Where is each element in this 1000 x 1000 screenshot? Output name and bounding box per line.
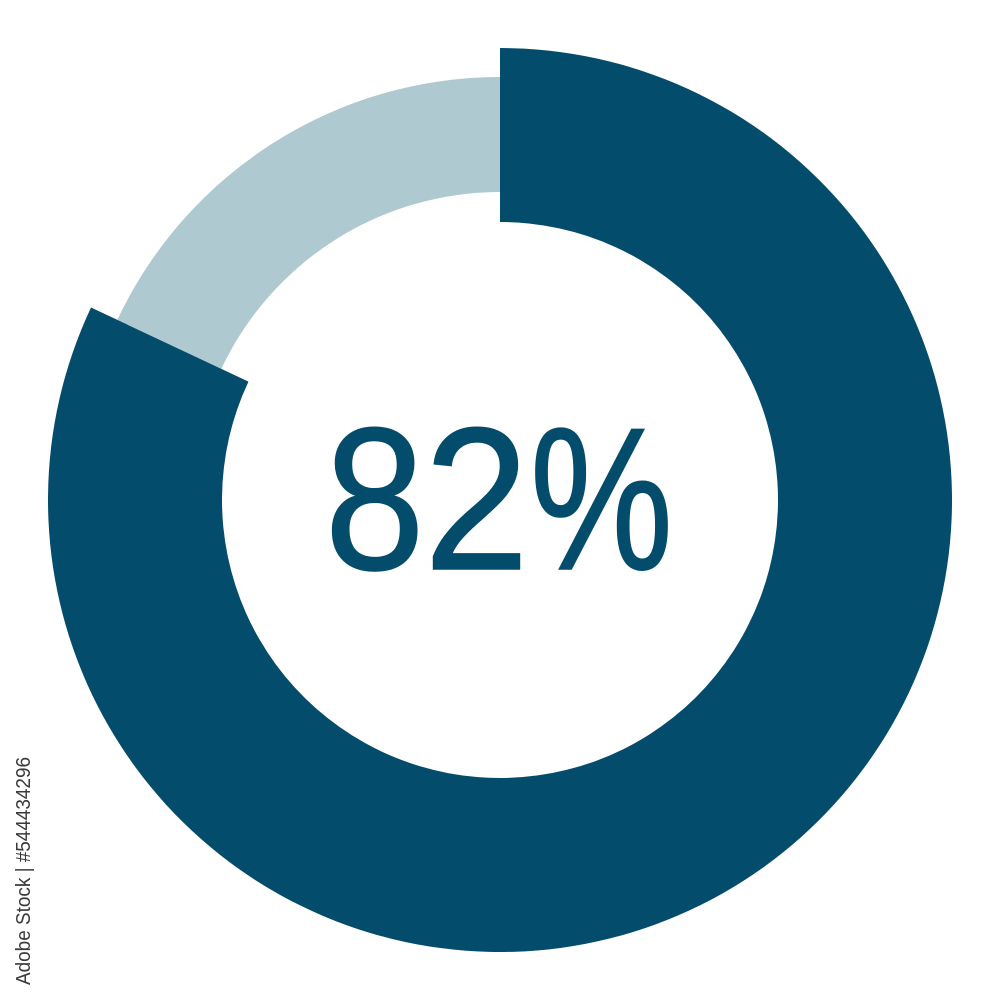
- remaining 18% segment: [117, 77, 500, 369]
- percentage label: [325, 386, 673, 613]
- percentage label: 2: [424, 386, 529, 613]
- stock credit: Adobe Stock | #544434296: [13, 757, 35, 985]
- percentage label: 8: [325, 386, 425, 613]
- percentage label: %: [530, 386, 673, 613]
